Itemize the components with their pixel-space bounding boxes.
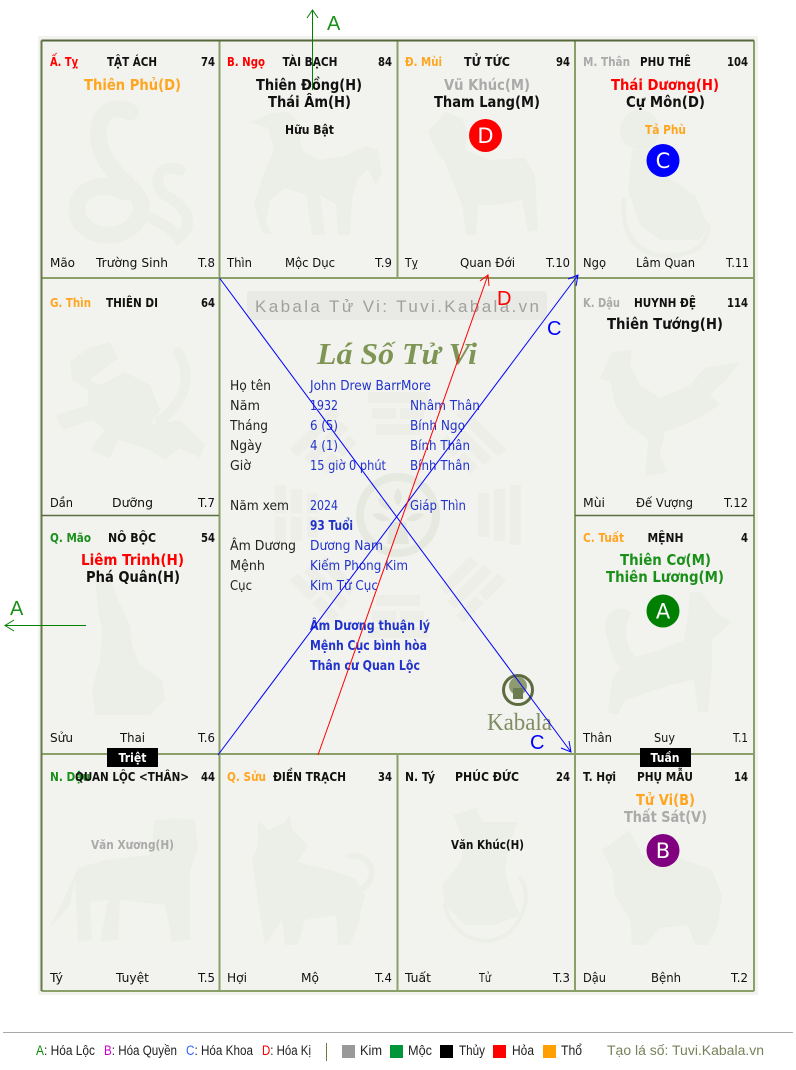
panel: Nô Bộc [50,530,215,745]
icon: ox [252,815,372,945]
palace footer: Quan Lộc: T.5 [197,970,215,985]
star: Phá Quân: Phá Quân(H) [86,568,180,586]
palace header: Mệnh: MỆNH [648,530,684,545]
bagua watermark [275,392,521,638]
icon: Kabala logo: Kabala [487,710,552,736]
palace header: Thiên Di [50,295,215,310]
palace footer: Phu Thê [583,255,749,270]
legend: four transformations: A: Hóa Lộc [36,1043,95,1058]
palace footer: Phu Thê: Ngọ [583,255,606,270]
palace footer: Điền Trạch: T.4 [374,970,392,985]
palace header: Phụ Mẫu: PHỤ MẪU [637,768,693,784]
palace header: Quan Lộc: N. Dậu [50,770,90,784]
panel: Tật Ách [50,52,215,270]
footer rule [3,1032,793,1033]
icon: snake [77,109,188,238]
palace header: Tật Ách [50,52,215,69]
palace header: Phụ Mẫu: T. Hợi [583,770,616,784]
palace footer: Tật Ách [50,255,215,270]
badge B: B [656,839,670,863]
info labels: Họ tên [230,378,271,394]
panel: Điền Trạch [227,767,392,985]
badge D: D [477,124,494,148]
center panel: chart information [229,291,552,736]
palace footer: Huynh Đệ [583,495,748,510]
palace footer: Tài Bạch: Mộc Dục [285,255,335,270]
star: Thiên Lương: Thiên Lương(M) [606,568,724,586]
arrow: C down right [220,278,571,752]
info values: 15 giờ 0 phút [310,458,386,474]
palace footer: Quan Lộc: Tý [49,970,64,985]
palace footer: Tử Tức: Tỵ [404,255,419,270]
badge D [469,119,502,152]
palace header: Tài Bạch: B. Ngọ [227,55,265,69]
palace header: Thiên Di: 64 [201,296,215,310]
icon: Kabala logo [487,676,552,736]
palace header: Điền Trạch: 34 [378,770,392,784]
info values: 1932 [310,398,338,414]
minor star: Văn Khúc: Văn Khúc(H) [451,837,524,852]
palace footer: Phụ Mẫu: Dậu [583,970,606,985]
legend: five elements: Hỏa [512,1043,534,1058]
palace header: Phúc Đức: N. Tý [405,770,435,784]
icon: tiger [50,818,198,942]
palace footer: Phụ Mẫu [583,970,748,985]
info values: Kim Tử Cục [310,578,378,594]
palace header: Tử Tức: TỬ TỨC [464,53,510,69]
palace header: Huynh Đệ: 114 [727,296,748,310]
palace header: Phúc Đức [405,769,570,784]
palace header: Phụ Mẫu [583,768,748,784]
badge C: C [656,149,670,173]
chart remarks [310,617,430,674]
palace header: Tử Tức: 94 [556,55,570,69]
palace footer: Huynh Đệ: Đế Vượng [636,495,693,510]
palace footer: Tài Bạch: T.9 [374,255,392,270]
arrow label C bottom: C [530,732,544,754]
palace footer: Tử Tức: T.10 [545,255,570,270]
panel: Tài Bạch [226,54,392,270]
badge C [646,144,680,177]
info values: 4 (1) [310,438,338,454]
palace header: Phúc Đức: PHÚC ĐỨC [455,769,519,784]
star: Thái Âm: Thái Âm(H) [268,92,351,111]
palace header: Huynh Đệ: HUYNH ĐỆ [634,295,696,310]
palace footer: Điền Trạch: Mộ [301,970,319,985]
star: Cự Môn: Cự Môn(D) [626,93,705,111]
palace footer: Phu Thê: T.11 [725,255,749,270]
chart remarks: Âm Dương thuận lý [310,617,430,634]
palace footer: Mệnh: Thân [582,730,612,745]
palace footer: Nô Bộc [50,730,215,745]
arrow: D up [318,275,489,755]
info labels: Tháng [229,418,268,434]
star: Thiên Đồng: Thiên Đồng(H) [256,75,362,94]
panel: Phúc Đức [404,769,570,985]
minor star: Hữu Bật: Hữu Bật [285,122,334,137]
palace header: Điền Trạch [227,767,392,784]
palace footer: Quan Lộc: Tuyệt [115,970,149,985]
palace header: Quan Lộc: QUAN LỘC <THÂN> [75,769,189,784]
arrow: A up [307,10,318,90]
palace footer: Điền Trạch [227,970,392,985]
legend: five elements: Thổ [561,1043,582,1058]
palace footer: Mệnh: Suy [654,730,676,745]
palace header: Tử Tức [405,53,570,69]
palace footer: Thiên Di [50,495,215,510]
legend: five elements: Thủy [459,1043,485,1058]
star: Tham Lang: Tham Lang(M) [434,93,540,111]
chart remarks: Mệnh Cục bình hòa [310,638,427,654]
palace header: Phu Thê: PHU THÊ [640,54,691,69]
panel: Phu Thê [583,54,749,270]
icon: dragon [56,342,205,460]
info values: Nhâm Thân [410,398,480,414]
panel: Tử Tức [404,53,570,270]
palace header: Phu Thê: M. Thân [583,55,630,69]
palace header: Huynh Đệ: K. Dậu [583,296,620,310]
palace header: Phu Thê [583,54,748,69]
icon: horse [250,112,382,235]
legend: four transformations [36,1043,311,1058]
palace footer: Tử Tức [404,255,570,270]
palace header: Tật Ách: TẬT ÁCH [107,54,157,69]
icon: rabbit [92,578,165,715]
label: Tuần: Tuần [650,750,680,765]
palace header: Tài Bạch: TÀI BẠCH [282,54,338,69]
palace footer: Mệnh: T.1 [732,730,748,745]
palace footer: Phúc Đức: Tuất [404,970,431,985]
panel: Huynh Đệ [583,295,748,510]
palace header: Thiên Di: THIÊN DI [106,295,158,310]
icon: monkey [620,110,708,256]
palace header: Nô Bộc: 54 [201,531,215,545]
badge A [646,594,680,628]
palace footer: Phúc Đức: T.3 [552,970,570,985]
legend: five elements: Kim [360,1043,382,1058]
palace footer: Phúc Đức [404,970,570,985]
info values: John Drew BarrMore [309,378,431,394]
arrow label A left: A [10,598,24,620]
arrow: C up right [218,275,578,755]
palace footer: Tật Ách: Mão [50,255,75,270]
star: Tử Vi: Tử Vi(B) [636,791,695,809]
palace footer: Huynh Đệ: T.12 [723,495,748,510]
info values [309,378,480,594]
palace footer: Huynh Đệ: Mùi [583,495,605,510]
label: Triệt: Triệt [118,750,147,765]
star: Thái Dương: Thái Dương(H) [611,76,719,94]
palace footer: Tài Bạch [226,255,392,270]
label: Tuần [640,748,691,767]
chart remarks: Thân cư Quan Lộc [310,658,420,674]
palace footer: Phu Thê: Lâm Quan [636,255,695,270]
info labels: Năm [230,398,260,414]
palace header: Thiên Di: G. Thìn [50,296,91,310]
info values: Kiếm Phong Kim [310,557,408,574]
palace header: Quan Lộc: 44 [201,770,215,784]
info labels: Mệnh [230,558,265,574]
info values: Bính Ngọ [410,418,465,434]
palace header: Tật Ách: Ấ. Tỵ [50,52,78,69]
legend: four transformations: B: Hóa Quyền [104,1043,177,1058]
icon: rooster [600,350,740,476]
palace header: Tài Bạch: 84 [378,55,392,69]
minor star: Tả Phù: Tả Phù [645,122,686,137]
info values: Giáp Thìn [410,498,466,514]
star: Liêm Trinh: Liêm Trinh(H) [81,551,184,569]
legend divider [326,1043,327,1061]
info values: 2024 [310,498,338,514]
minor star: Văn Xương: Văn Xương(H) [91,837,174,852]
star: Thiên Phủ: Thiên Phủ(D) [84,76,181,94]
palace footer: Thiên Di: Dưỡng [112,495,153,510]
palace grid lines [42,40,754,991]
info values: Bính Thân [410,438,470,454]
website watermark banner: Kabala Tử Vi: Tuvi.Kabala.vn [255,297,539,316]
palace header: Tử Tức: Đ. Mùi [405,55,442,69]
palace footer: Nô Bộc: Sửu [50,730,73,745]
info values: 6 (5) [310,418,338,434]
arrow label D: D [497,288,511,310]
title: Lá Số Tử Vi: Lá Số Tử Vi [316,336,477,371]
legend: five elements: Mộc [408,1043,432,1058]
info labels: Âm Dương [230,536,296,554]
palace header: Mệnh [583,530,748,545]
palace footer: Phúc Đức: Tử [478,970,492,985]
palace header: Tài Bạch [227,54,392,69]
star: Thiên Tướng: Thiên Tướng(H) [607,315,723,333]
palace footer: Tật Ách: T.8 [197,255,215,270]
icon: dog [605,592,732,715]
info values: Bính Thân [410,458,470,474]
palace header: Tật Ách: 74 [201,55,215,69]
palace footer: Phụ Mẫu: T.2 [730,970,748,985]
info labels: Giờ [230,458,252,474]
footer link text: Tạo lá số: Tuvi.Kabala.vn [607,1043,764,1058]
panel: Thiên Di [50,295,215,510]
palace footer: Tật Ách: Trường Sinh [95,255,168,270]
arrow label C right: C [547,318,561,340]
palace footer: Tử Tức: Quan Đới [460,255,515,270]
info labels: Ngày [230,438,262,454]
palace header: Điền Trạch: ĐIỀN TRẠCH [273,767,346,784]
palace header: Phúc Đức: 24 [556,770,570,784]
palace header: Phu Thê: 104 [727,55,748,69]
icon: goat [428,112,538,235]
palace header: Điền Trạch: Q. Sửu [227,770,266,784]
info labels: Năm xem [230,498,289,514]
palace footer: Điền Trạch: Hợi [227,970,247,985]
info labels: Cục [230,578,252,594]
palace footer: Thiên Di: Dần [50,495,73,510]
palace header: Mệnh: C. Tuất [583,531,624,545]
palace footer: Nô Bộc: T.6 [197,730,215,745]
badge B [646,834,680,867]
info values: 93 Tuổi [310,517,353,534]
panel: Mệnh [582,530,748,745]
info labels [229,378,296,594]
badge A: A [656,600,671,624]
legend: four transformations: C: Hóa Khoa [186,1043,253,1058]
star: Vũ Khúc: Vũ Khúc(M) [444,76,530,94]
palace footer: Nô Bộc: Thai [119,730,145,745]
palace footer: Thiên Di: T.7 [197,495,215,510]
palace footer: Phụ Mẫu: Bệnh [651,970,681,985]
palace header: Nô Bộc [50,530,215,545]
palace footer: Mệnh [582,730,748,745]
icon: rat [442,808,526,941]
info values: Dương Nam [310,538,383,554]
label: Triệt [107,748,158,767]
palace header: Phụ Mẫu: 14 [734,770,748,784]
palace footer: Tài Bạch: Thìn [226,255,252,270]
palace header: Mệnh: 4 [741,531,748,545]
star: Thiên Cơ: Thiên Cơ(M) [620,551,711,569]
star: Thất Sát: Thất Sát(V) [624,808,707,826]
panel: Quan Lộc [49,769,215,985]
arrow label A top: A [327,13,341,35]
panel: Phụ Mẫu [583,768,748,985]
palace header: Nô Bộc: NÔ BỘC [108,530,156,545]
palace footer: Quan Lộc [49,970,215,985]
icon: pig [602,830,722,945]
palace header: Nô Bộc: Q. Mão [50,531,91,545]
website watermark banner [247,291,547,320]
legend: five elements [342,1043,582,1058]
legend: four transformations: D: Hóa Kị [262,1043,311,1058]
palace header: Huynh Đệ [583,295,748,310]
arrow: A left [5,620,86,631]
